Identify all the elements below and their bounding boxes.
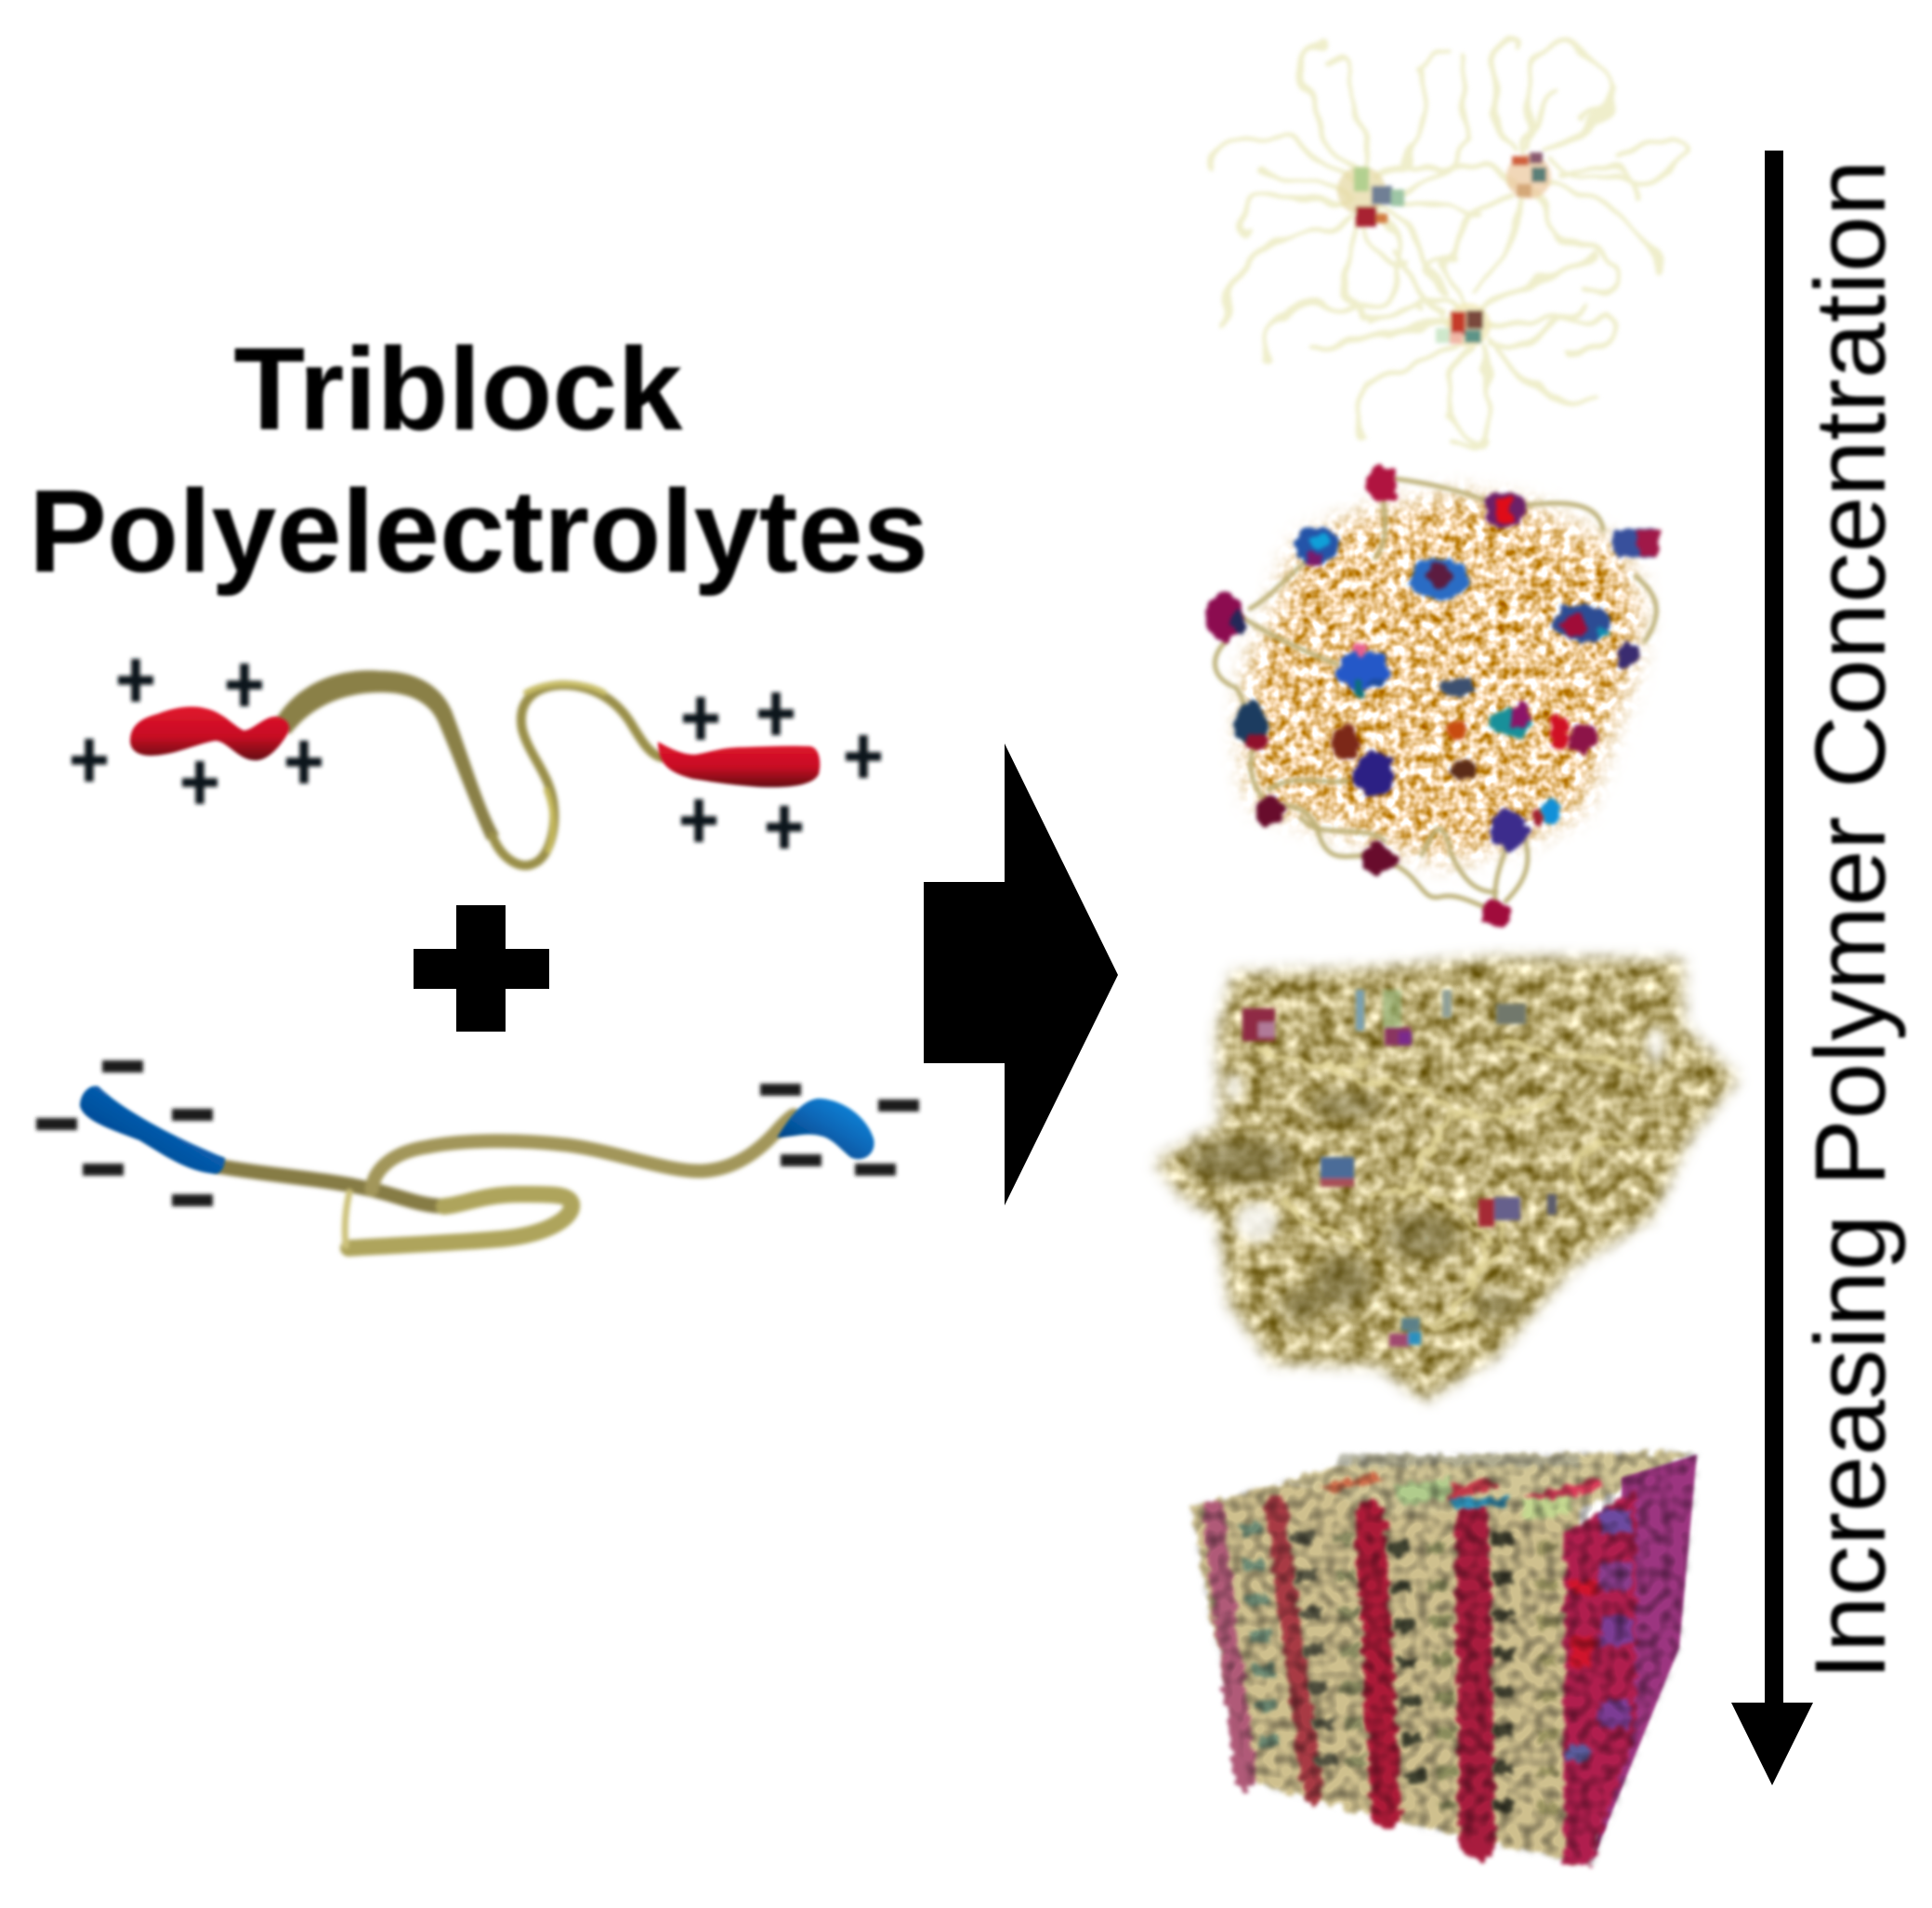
pale strand highlights [1255,1041,1636,1328]
micelle core 1 [1337,166,1404,227]
dark periodic chain marks [1250,1524,1547,1822]
plus charges [72,659,881,849]
axis label: Increasing Polymer Concentration [1794,160,1906,1680]
panel: micelle network [1205,466,1658,928]
title: Triblock Polyelectrolytes [29,323,928,597]
panel: hydrogel network [1155,957,1738,1401]
blue charged end block left [80,1086,225,1174]
micelle core 3 [1436,303,1491,348]
title: Triblock Polyelectrolytes: Triblock [233,323,683,454]
vertical arrow: increasing concentration [1731,151,1813,1785]
title: Triblock Polyelectrolytes: Polyelectrolytes [29,466,928,597]
red side stripes [1564,1492,1636,1865]
top face [1284,1452,1691,1515]
side-face colour patches [1566,1510,1634,1762]
blue charged end block right [777,1099,874,1159]
network strand mass [1245,497,1640,860]
minus charges [36,1060,919,1206]
panel: dilute micelles [1208,33,1692,446]
polyanion chain with negative charges [36,1060,919,1248]
panel: lamellar phase [1192,1452,1697,1865]
micelle corona strands [1208,33,1692,446]
magenta side face [1591,1454,1697,1863]
top-face stripes and colour accents [1320,1454,1603,1520]
grain overlay [1192,1452,1697,1865]
neutral tan mid-block [219,1115,794,1248]
large plus sign [414,905,549,1032]
dense strand mass [1155,957,1738,1401]
polycation chain with positive charges [72,659,881,865]
dense dark regions [1187,1093,1522,1322]
ionic aggregates [1242,990,1557,1347]
red charged end block right [658,742,820,787]
voids in the strand mass [1226,1027,1666,1243]
loose outer strands [1215,479,1656,911]
lamellar stripes [1213,1506,1478,1842]
neutral tan mid-block [275,670,662,865]
red charged end block left [130,706,289,760]
large process arrow pointing right [924,743,1118,1205]
tan front face [1192,1482,1580,1863]
ionic aggregates [1205,466,1658,928]
micelle core 2 [1506,152,1551,199]
